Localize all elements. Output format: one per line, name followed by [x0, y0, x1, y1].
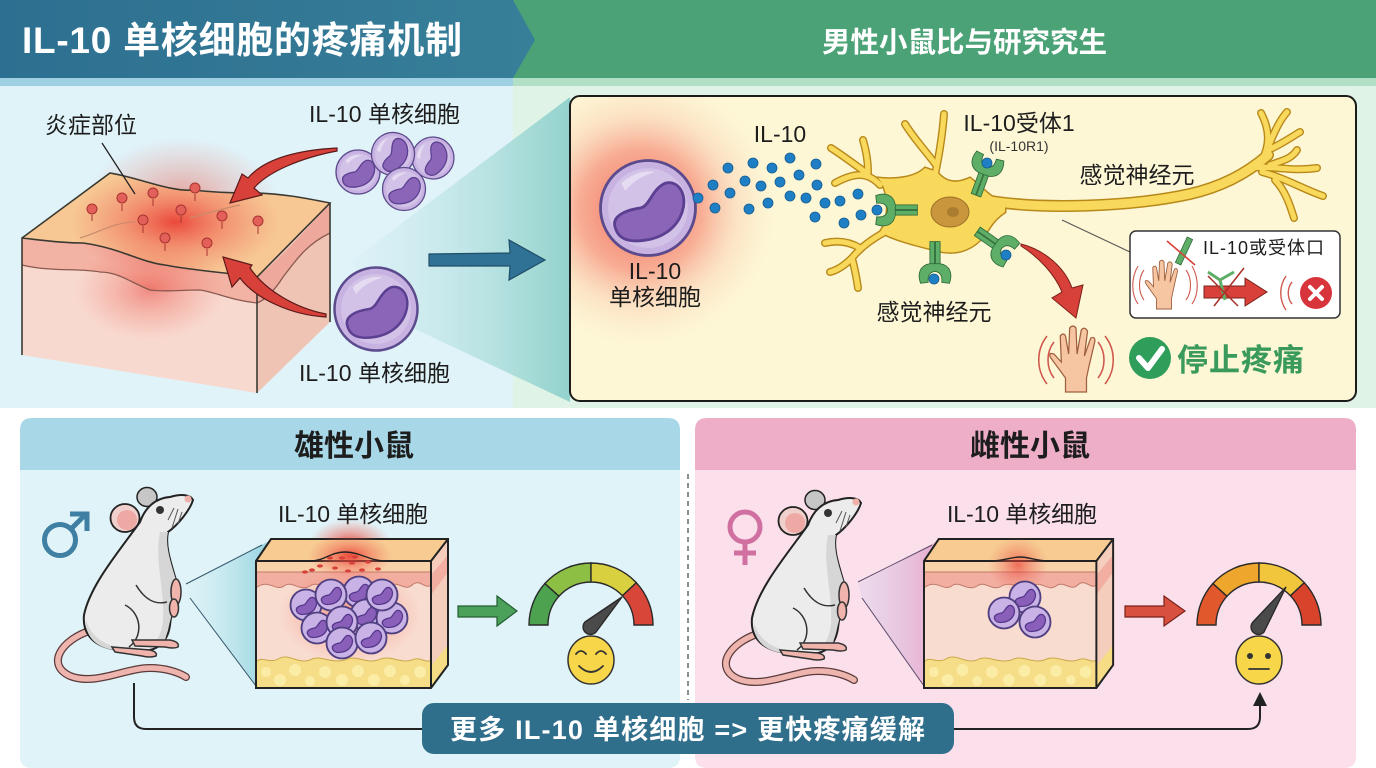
icon: red x	[1281, 276, 1332, 310]
icon: crossed receptor	[1167, 237, 1195, 265]
zoom funnel female	[858, 540, 940, 686]
IL-10 molecules	[693, 153, 1011, 284]
icon: inset hand	[1133, 260, 1197, 309]
label: IL-10 monocytes bottom: IL-10 单核细胞	[299, 360, 450, 386]
label: inflammation site	[45, 112, 137, 194]
arrow: female red	[1125, 596, 1185, 626]
glow behind monocyte	[571, 97, 756, 326]
zoom funnel from cell to mechanism panel	[350, 97, 570, 402]
icon: monocyte cluster	[336, 125, 463, 210]
top right green band background	[513, 78, 1376, 86]
label: monocyte: 单核细胞	[609, 284, 701, 310]
zoom funnel male	[186, 540, 271, 686]
monocyte cluster male	[290, 576, 408, 658]
header: left blue arrow band	[0, 0, 535, 78]
neuron	[825, 112, 1323, 288]
panel: mechanism background	[513, 86, 1376, 408]
heading: right subtitle: 男性小鼠比与研究究生	[822, 27, 1107, 59]
top left blue band background	[0, 78, 513, 86]
label: female IL-10 monocytes: IL-10 单核细胞	[947, 501, 1097, 527]
arrow: cell to site bottom	[223, 257, 326, 317]
illustration: female skin block	[924, 537, 1113, 688]
icon: male symbol	[44, 514, 87, 556]
illustration: male skin block	[256, 519, 448, 688]
heading: female: 雌性小鼠	[970, 430, 1090, 463]
label: stop pain: 停止疼痛	[1177, 343, 1304, 378]
label: monocyte	[609, 258, 701, 310]
icon: green check	[1129, 337, 1171, 379]
arrow: banner to female gauge	[952, 692, 1267, 729]
illustration: male mouse	[58, 488, 193, 679]
illustration: female mouse	[726, 490, 861, 682]
monocyte cluster female	[988, 582, 1050, 638]
header: right green band	[513, 0, 1376, 78]
icon: large monocyte	[334, 268, 418, 350]
panel: inflammation site background	[0, 86, 513, 408]
emoji: smile	[568, 636, 614, 684]
label: IL-10 receptor 1	[963, 110, 1075, 154]
arrow: cells to site top	[230, 148, 337, 203]
connector: male to banner	[134, 683, 424, 729]
panel: male mice	[20, 418, 680, 768]
icon: calm hand with waves	[1039, 326, 1113, 392]
icon: IL-10 monocyte	[600, 160, 696, 256]
receptors	[876, 151, 1021, 283]
title: IL-10 单核细胞的疼痛机制	[22, 20, 462, 61]
label: male IL-10 monocytes: IL-10 单核细胞	[278, 501, 428, 527]
label: inflammation site: 炎症部位	[45, 112, 137, 138]
arrow: male green	[458, 596, 517, 626]
red spots	[302, 555, 381, 574]
banner: conclusion	[422, 703, 954, 754]
label: sensory neuron right: 感觉神经元	[1080, 162, 1194, 188]
panel: mechanism	[569, 95, 1357, 402]
label: sensory neuron bottom: 感觉神经元	[876, 299, 992, 325]
label: IL-10 receptor 1: (IL-10R1)	[989, 138, 1049, 154]
label: IL-10 monocytes top: IL-10 单核细胞	[309, 101, 460, 127]
skin block illustration	[22, 138, 330, 393]
icon: female symbol	[730, 512, 760, 565]
gauge: male	[529, 563, 653, 634]
callout text: IL-10或受体口	[1203, 238, 1324, 258]
gauge: female	[1197, 563, 1321, 634]
arrow: blue to mechanism	[429, 240, 545, 280]
label: IL-10: IL-10	[754, 121, 806, 147]
inflammation pins	[87, 183, 263, 256]
arrow: to pain relief	[1021, 244, 1083, 318]
emoji: neutral	[1236, 636, 1282, 684]
panel: female mice	[695, 418, 1356, 768]
callout: knockout inset	[1062, 220, 1340, 318]
banner: conclusion: 更多 IL-10 单核细胞 => 更快疼痛缓解	[450, 715, 925, 745]
heading: male: 雄性小鼠	[294, 430, 414, 463]
icon: blocked arrow	[1204, 268, 1267, 306]
label: monocyte: IL-10	[629, 258, 681, 284]
label: IL-10 receptor 1: IL-10受体1	[963, 110, 1075, 136]
